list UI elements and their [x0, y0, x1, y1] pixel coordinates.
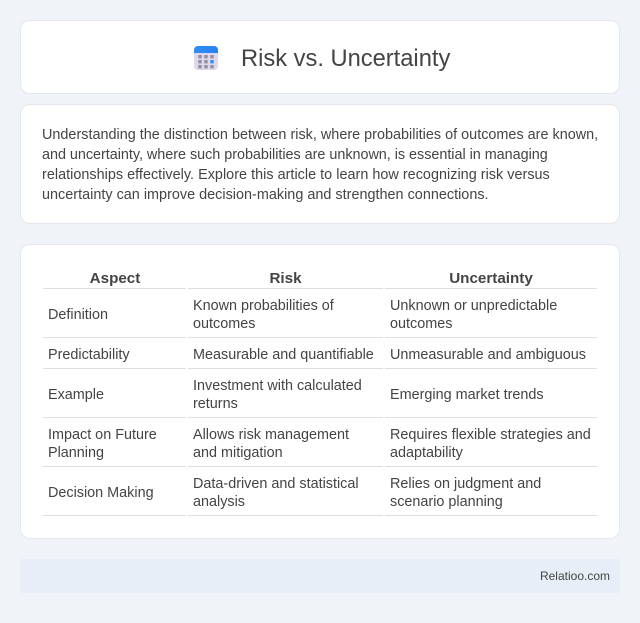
- row: Definition: outcomes: [390, 316, 452, 332]
- text block: introduction: relationships effectively. Explore this article to learn how recognizing risk versus: [42, 167, 550, 183]
- column header: Risk: Risk: [269, 270, 302, 287]
- row: Impact on Future Planning: Planning: [48, 445, 104, 461]
- panel: header: [20, 20, 620, 94]
- row: Decision Making: scenario planning: [390, 494, 503, 510]
- row: Definition: Definition: [48, 307, 108, 323]
- row: Example: Example: [48, 387, 104, 403]
- row: Decision Making: analysis: [193, 494, 245, 510]
- column header: Aspect: Aspect: [90, 270, 140, 287]
- row: Example: Investment with calculated: [193, 378, 362, 394]
- row: Impact on Future Planning: [48, 427, 591, 461]
- column header: Uncertainty: Uncertainty: [449, 270, 533, 287]
- row: Definition: Known probabilities of: [193, 298, 334, 314]
- row: Definition: Unknown or unpredictable: [390, 298, 557, 314]
- row: Definition: outcomes: [193, 316, 255, 332]
- row: Predictability: Predictability: [48, 347, 130, 363]
- panel: introduction: [20, 104, 620, 224]
- row: Impact on Future Planning: and mitigation: [193, 445, 283, 461]
- row: Impact on Future Planning: Requires flexible strategies and: [390, 427, 591, 443]
- row: Example: [48, 378, 544, 412]
- text block: introduction: and uncertainty, where such probabilities are unknown, is essential in managing: [42, 147, 548, 163]
- icon: calendar: [194, 46, 218, 70]
- panel: comparison table: [20, 244, 620, 539]
- text block: introduction: uncertainty can improve decision-making and strengthen connections.: [42, 187, 489, 203]
- row: Impact on Future Planning: Allows risk management: [193, 427, 349, 443]
- row: Decision Making: Data-driven and statistical: [193, 476, 359, 492]
- title: Risk vs. Uncertainty: [241, 46, 450, 72]
- row: Predictability: [48, 347, 586, 363]
- row: Predictability: Measurable and quantifiable: [193, 347, 374, 363]
- row: Impact on Future Planning: adaptability: [390, 445, 463, 461]
- text block: introduction: [42, 127, 598, 203]
- panel: footer: [20, 559, 620, 593]
- row: Predictability: Unmeasurable and ambiguous: [390, 347, 586, 363]
- row: Decision Making: Decision Making: [48, 485, 154, 501]
- row: Decision Making: Relies on judgment and: [390, 476, 541, 492]
- footer credit: Relatioo.com: [540, 569, 610, 583]
- row: Decision Making: [48, 476, 541, 510]
- row: Impact on Future Planning: Impact on Future: [48, 427, 157, 443]
- text block: introduction: Understanding the distinction between risk, where probabilities of outcomes are known,: [42, 127, 598, 143]
- row: Example: returns: [193, 396, 238, 412]
- row: Definition: [48, 298, 557, 332]
- row: Example: Emerging market trends: [390, 387, 544, 403]
